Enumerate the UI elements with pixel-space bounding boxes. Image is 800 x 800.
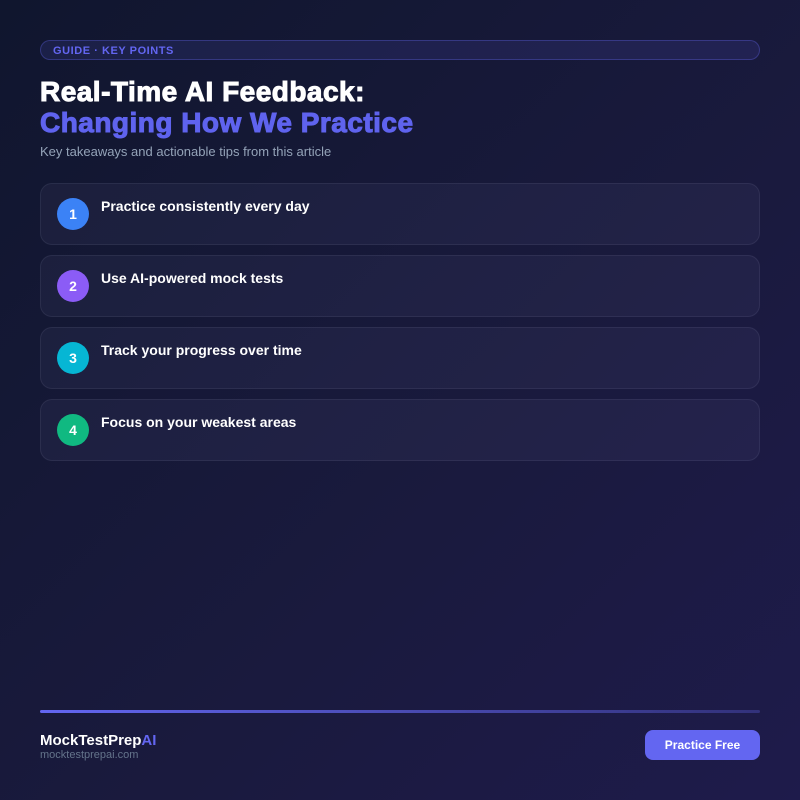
number badge 4: 4 [69, 422, 77, 438]
badge: guide key points [40, 40, 760, 60]
card 2 text: Use AI-powered mock tests [101, 270, 283, 286]
title [40, 76, 414, 138]
number badge 1: 1 [69, 206, 77, 222]
card 1 [40, 183, 760, 245]
card 2 [40, 255, 760, 317]
subtitle: Key takeaways and actionable tips from this article [40, 144, 331, 159]
card 3 [40, 327, 760, 389]
number badge 1 [57, 198, 89, 230]
button: practice free: Practice Free [665, 738, 740, 752]
card 4 text: Focus on your weakest areas [101, 414, 296, 430]
badge: guide key points: GUIDE · KEY POINTS [53, 45, 174, 57]
card 4 [40, 399, 760, 461]
brand url: mocktestprepai.com [40, 749, 138, 761]
brand [40, 732, 156, 761]
number badge 3 [57, 342, 89, 374]
title: Real-Time AI Feedback: [40, 76, 365, 107]
number badge 2 [57, 270, 89, 302]
card 1 text: Practice consistently every day [101, 198, 310, 214]
brand name: MockTestPrepAI [40, 732, 156, 749]
accent bar [40, 710, 760, 713]
number badge 3: 3 [69, 350, 77, 366]
title: Changing How We Practice [40, 107, 414, 138]
number badge 2: 2 [69, 278, 77, 294]
card 3 text: Track your progress over time [101, 342, 302, 358]
button: practice free [645, 730, 760, 760]
number badge 4 [57, 414, 89, 446]
